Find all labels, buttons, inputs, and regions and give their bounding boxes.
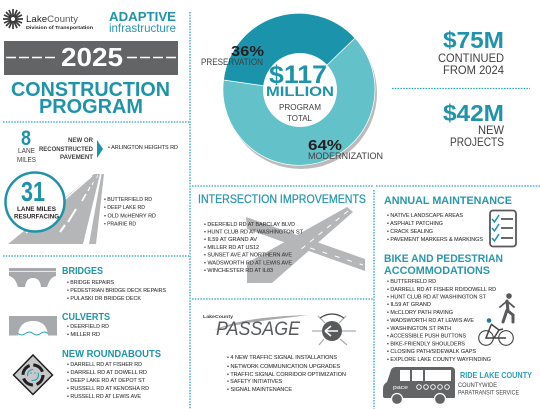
heading: Annual maintenance: ANNUAL MAINTENANCE [384, 195, 512, 207]
heading: Bridges: BRIDGES [62, 266, 103, 277]
heading: Bike and pedestrian accommodations: ACCOMMODATIONS [384, 265, 490, 277]
badge: 31 lane miles resurfacing: LANE MILES [17, 206, 57, 213]
list: resurfacing roads: • BUTTERFIELD RD [104, 197, 152, 203]
list: maintenance [387, 213, 483, 243]
title: Construction Program: PROGRAM [39, 95, 143, 118]
center label: $117 million program total: TOTAL [287, 114, 313, 123]
stat: 8 lane miles: MILES [17, 157, 36, 164]
list: bike and pedestrian: • DARRELL RD AT FISHER RD/DOWELL RD [387, 287, 496, 293]
panel: pavement [6, 127, 178, 244]
list: roundabouts: • RUSSELL RD AT LEWIS AVE [67, 394, 141, 400]
stat: $75M continued from 2024 [438, 27, 504, 77]
list: intersections: • MILLER RD AT US12 [204, 245, 259, 251]
list: culverts [67, 324, 109, 338]
list: resurfacing roads [104, 197, 156, 228]
stat: $42M new projects [443, 100, 505, 149]
list: bike and pedestrian: • IL59 AT GRAND [387, 302, 431, 308]
list: intersections: • WADSWORTH RD AT LEWIS AVE [204, 260, 292, 266]
label: new or reconstructed pavement: RECONSTRUCTED [39, 146, 93, 153]
list: bike and pedestrian [387, 279, 496, 363]
icon: traffic signal arrow [312, 314, 356, 345]
panel: bike and pedestrian accommodations [384, 253, 514, 363]
chart: donut of program funding [201, 13, 383, 169]
text: Ride Lake County: COUNTYWIDE [458, 383, 497, 389]
label: new or reconstructed pavement: PAVEMENT [60, 154, 93, 161]
stat: 8 lane miles: 8 [21, 127, 31, 150]
list: bike and pedestrian: • HUNT CLUB RD AT WASHINGTON ST [387, 294, 486, 300]
heading: Bike and pedestrian accommodations: BIKE AND PEDESTRIAN [384, 253, 503, 265]
logo: LakeCounty Passage [203, 314, 308, 340]
icon: culvert [9, 316, 57, 336]
center label: $117 million program total: MILLION [266, 83, 334, 99]
panel: bridges, culverts, roundabouts [9, 266, 166, 400]
panel: intersection improvements [198, 192, 366, 283]
list: signal work: • NETWORK COMMUNICATION UPGRADES [227, 364, 340, 370]
center label: $117 million program total [266, 61, 334, 123]
list: culverts: • DEERFIELD RD [67, 324, 109, 330]
list: maintenance: • CRACK SEALING [387, 229, 433, 235]
banner: 2025 road: 2025 [61, 42, 123, 72]
list: signal work [227, 355, 346, 393]
stat: 8 lane miles: LANE [18, 148, 35, 155]
icon: pedestrian [500, 293, 514, 322]
heading: New roundabouts: NEW ROUNDABOUTS [62, 349, 161, 360]
stat: $42M new projects: $42M [443, 100, 504, 126]
list: roundabouts: • DEEP LAKE RD AT DEPOT ST [67, 378, 145, 384]
stat: $75M continued from 2024: $75M [443, 27, 504, 53]
logo: Lake County Division of Transportation: LakeCounty [26, 14, 79, 24]
list: bike and pedestrian: • WADSWORTH RD AT LEWIS AVE [387, 318, 474, 324]
panel: annual maintenance [384, 195, 516, 246]
title: Construction Program: CONSTRUCTION [11, 78, 170, 101]
label: 36% preservation: 36% [231, 43, 264, 60]
list: roundabouts: • DARRELL RD AT DOWELL RD [67, 370, 147, 376]
panel: ride Lake County [383, 367, 532, 404]
list: resurfacing roads: • PRAIRIE RD [104, 222, 136, 228]
list: resurfacing roads: • OLD McHENRY RD [104, 214, 156, 220]
icon: roundabout sign [14, 355, 52, 394]
stat: $75M continued from 2024: CONTINUED [438, 51, 504, 65]
list: bike and pedestrian: • EXPLORE LAKE COUNTY WAYFINDING [387, 357, 491, 363]
icon: cyclist [479, 318, 513, 345]
list: resurfacing roads: • DEEP LAKE RD [104, 205, 145, 211]
list: roundabouts: • DARRELL RD AT FISHER RD [67, 362, 142, 368]
list: intersections: • DEERFIELD RD AT BARCLAY BLVD [204, 222, 295, 228]
text: Ride Lake County [458, 370, 532, 396]
icon: Pace bus: pace [393, 385, 408, 391]
stat: $42M new projects: PROJECTS [450, 135, 504, 149]
list: bike and pedestrian: • WASHINGTON ST PATH [387, 326, 451, 332]
list: maintenance: • PAVEMENT MARKERS & MARKINGS [387, 237, 483, 243]
stat: $42M new projects: NEW [478, 123, 505, 137]
list: roundabouts [67, 362, 149, 400]
list: roundabouts: • RUSSELL RD AT KENOSHA RD [67, 386, 149, 392]
heading: Intersection improvements: INTERSECTION IMPROVEMENTS [198, 192, 366, 206]
label: 36% preservation [201, 43, 264, 67]
logo: LakeCounty Passage: PASSAGE [216, 319, 300, 340]
label: new or reconstructed pavement [39, 137, 93, 161]
logo: Lake County Division of Transportation [3, 9, 93, 30]
badge: 31 lane miles resurfacing [6, 172, 64, 232]
logo: Adaptive infrastructure: infrastructure [109, 21, 176, 35]
icon: Pace bus [383, 367, 455, 404]
logo: Lake County Division of Transportation: Division of Transportation [26, 25, 93, 30]
stat: 8 lane miles [17, 127, 36, 164]
panel: Passage traffic system [203, 314, 356, 393]
illustration: crossing roads [246, 207, 365, 283]
logo: Adaptive infrastructure [109, 9, 176, 35]
list: bike and pedestrian: • BIKE-FRIENDLY SHOULDERS [387, 342, 465, 348]
list: signal work: • TRAFFIC SIGNAL CORRIDOR OPTIMIZATION [227, 372, 346, 378]
text: Arlington Heights Rd: • ARLINGTON HEIGHTS RD [108, 145, 178, 151]
logo: LakeCounty Passage: LakeCounty [203, 314, 234, 319]
logo: Adaptive infrastructure: ADAPTIVE [109, 9, 176, 24]
list: signal work: • SIGNAL MAINTENANCE [227, 387, 292, 393]
list: maintenance: • NATIVE LANDSCAPE AREAS [387, 213, 463, 219]
center label: $117 million program total: PROGRAM [279, 103, 321, 112]
list: bridges: • PEDESTRIAN BRIDGE DECK REPAIRS [67, 288, 166, 294]
title: Construction Program [11, 78, 170, 118]
list: intersections: • IL59 AT GRAND AV [204, 237, 257, 243]
stat: $75M continued from 2024: FROM 2024 [443, 63, 504, 77]
list: bike and pedestrian: • CLOSING PATH/SIDEWALK GAPS [387, 349, 476, 355]
list: bike and pedestrian: • BUTTERFIELD RD [387, 279, 436, 285]
icon: checklist [490, 210, 516, 246]
list: intersections: • WINCHESTER RD AT IL83 [204, 268, 273, 274]
panel: funding stats [438, 27, 505, 149]
list: signal work: • SAFETY INITIATIVES [227, 379, 282, 385]
list: intersections: • SUNSET AVE AT NORTHERN AVE [204, 252, 292, 258]
badge: 31 lane miles resurfacing: RESURFACING [14, 214, 59, 220]
label: 36% preservation: PRESERVATION [201, 57, 263, 67]
list: bridges: • BRIDGE REPAIRS [67, 280, 114, 286]
heading: Bike and pedestrian accommodations [384, 253, 503, 277]
list: maintenance: • ASPHALT PATCHING [387, 221, 443, 227]
list: bike and pedestrian: • ACCESSIBLE PUSH BUTTONS [387, 334, 466, 340]
list: bike and pedestrian: • McCLORY PATH PAVING [387, 310, 453, 316]
list: intersections [204, 222, 303, 274]
arrow [97, 140, 103, 158]
banner: 2025 road [4, 41, 178, 75]
label: 64% modernization: 64% [308, 137, 342, 154]
panel: header and title [3, 9, 178, 118]
illustration: road [8, 174, 104, 244]
label: 64% modernization: MODERNIZATION [308, 151, 383, 161]
list: signal work: • 4 NEW TRAFFIC SIGNAL INSTALLATIONS [227, 355, 337, 361]
list: culverts: • MILLER RD [67, 332, 100, 338]
label: new or reconstructed pavement: NEW OR [68, 137, 93, 144]
heading: Culverts: CULVERTS [62, 312, 110, 323]
text: Ride Lake County: PARATRANSIT SERVICE [458, 390, 519, 396]
list: bridges [67, 280, 166, 302]
center label: $117 million program total: $117 [269, 61, 327, 89]
icon: bridge [9, 268, 56, 287]
badge: 31 lane miles resurfacing: 31 [21, 176, 45, 207]
list: intersections: • HUNT CLUB RD AT WASHINGTON ST [204, 230, 303, 236]
list: bridges: • PULASKI DR BRIDGE DECK [67, 296, 141, 302]
label: 64% modernization [308, 137, 383, 161]
